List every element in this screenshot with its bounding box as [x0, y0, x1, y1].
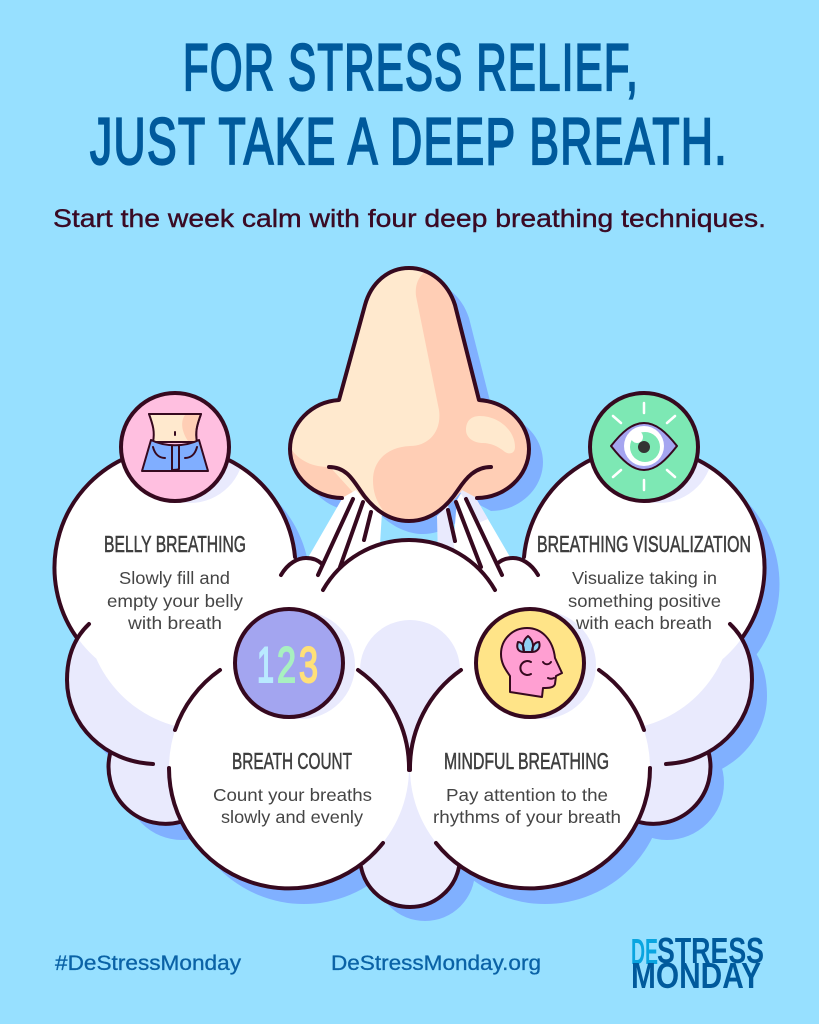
heading: breath count: BREATH COUNT [232, 748, 352, 774]
logo: STRESS [657, 930, 764, 971]
icon: eye [590, 393, 698, 501]
panel: mindful breathing [433, 609, 621, 827]
subtitle: Start the week calm with four deep breathing techniques. [53, 205, 766, 233]
logo [631, 930, 764, 996]
text: belly breathing description: Slowly fill and [119, 568, 230, 588]
panel: breathing visualization [537, 393, 751, 633]
icon: 123 [235, 609, 343, 717]
text: breathing visualization description: with each breath [575, 613, 712, 633]
text: breath count description: Count your breaths [213, 785, 372, 805]
title [90, 30, 728, 178]
nose shadow [304, 281, 543, 534]
cloud drop shadow [70, 464, 780, 921]
nose [288, 266, 531, 523]
panel: belly breathing [104, 393, 246, 633]
icon: 123: 3 [299, 637, 318, 693]
text: breath count description: slowly and evenly [221, 807, 363, 827]
text: mindful breathing description: rhythms of your breath [433, 807, 621, 827]
air streams [309, 483, 510, 590]
heading: belly breathing: BELLY BREATHING [104, 531, 246, 557]
icon: 123: 1 [257, 637, 274, 693]
panel: breath count [213, 609, 372, 827]
text: breathing visualization description: something positive [568, 591, 721, 611]
website: DeStressMonday.org [331, 952, 541, 975]
text: belly breathing description: empty your belly [107, 591, 243, 611]
text: breathing visualization description: Visualize taking in [572, 568, 717, 588]
text: mindful breathing description: Pay attention to the [446, 785, 608, 805]
text: breath count description [213, 785, 372, 827]
heading: mindful breathing: MINDFUL BREATHING [444, 748, 609, 774]
icon: 123: 2 [277, 637, 296, 693]
cloud outlines [54, 447, 765, 907]
text: belly breathing description [107, 568, 243, 633]
hashtag: #DeStressMonday [55, 952, 242, 975]
icon: mindful head [476, 609, 584, 717]
logo: DE [631, 931, 658, 972]
text: mindful breathing description [433, 785, 621, 827]
text: belly breathing description: with breath [127, 613, 222, 633]
logo: MONDAY [631, 955, 761, 996]
cloud body [56, 462, 763, 905]
text: breathing visualization description [568, 568, 721, 633]
icon: belly [121, 393, 229, 501]
